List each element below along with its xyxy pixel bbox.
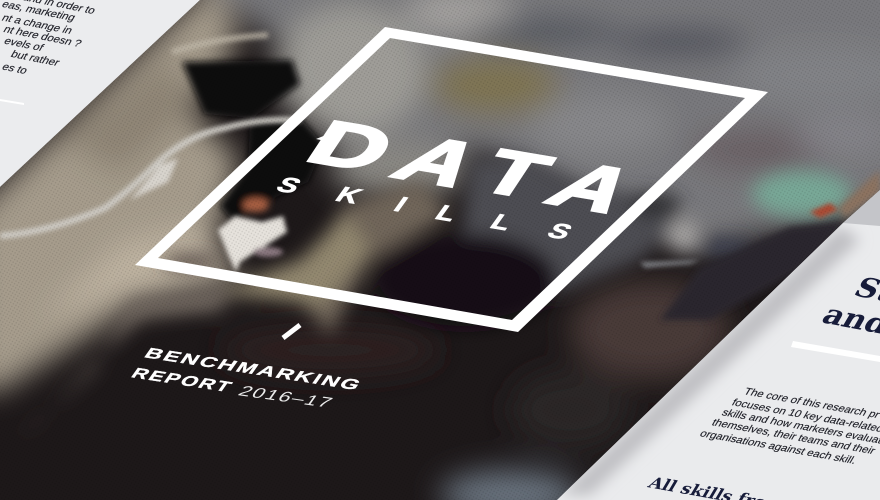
title: DATA: A [376,124,500,200]
decoration: right page stripes [843,190,880,226]
divider: left page white bar [0,99,24,105]
divider: right page white bar [791,341,880,362]
panel: right page [557,190,880,500]
subtitle: SKILLS: L [485,210,519,235]
subtitle: SKILLS: K [330,183,368,208]
text: BENCHMARKING REPORT 2016–17 [127,345,366,411]
text block: left page body copy: nt here doesn ? [1,24,83,50]
title: DATA: T [466,137,564,211]
text block: left page body copy: es to [0,62,29,77]
subtitle: SKILLS [271,173,577,244]
text block: right page intro copy: organisations against each skill. [698,428,859,466]
text block: right page intro copy: The core of this research pr [742,386,880,421]
subtitle: SKILLS: S [542,219,577,244]
text block: right page intro copy [698,386,880,466]
subtitle: SKILLS: L [430,201,464,226]
text: BENCHMARKING REPORT 2016–17: REPORT [127,366,236,396]
mark: short divider stroke [283,325,300,338]
text block: left page body copy: evels of [2,36,46,54]
heading: right page title [816,272,880,341]
frame: white square outline [135,27,768,332]
text block: left page body copy: but rather [8,49,62,69]
decoration: right page edge shadow [560,226,860,495]
text: BENCHMARKING REPORT 2016–17: BENCHMARKING [141,345,366,394]
subtitle: SKILLS: S [271,173,306,198]
text block: right page intro copy: themselves, their teams and their [710,417,878,457]
title: DATA [294,108,654,226]
subtitle: SKILLS: I [389,193,413,216]
title: DATA: A [530,150,654,226]
text block: left page body copy [0,0,97,77]
title: DATA: D [294,108,408,185]
text block: left page body copy: nt a change in [0,13,74,37]
text: BENCHMARKING REPORT 2016–17: 2016–17 [234,384,337,411]
